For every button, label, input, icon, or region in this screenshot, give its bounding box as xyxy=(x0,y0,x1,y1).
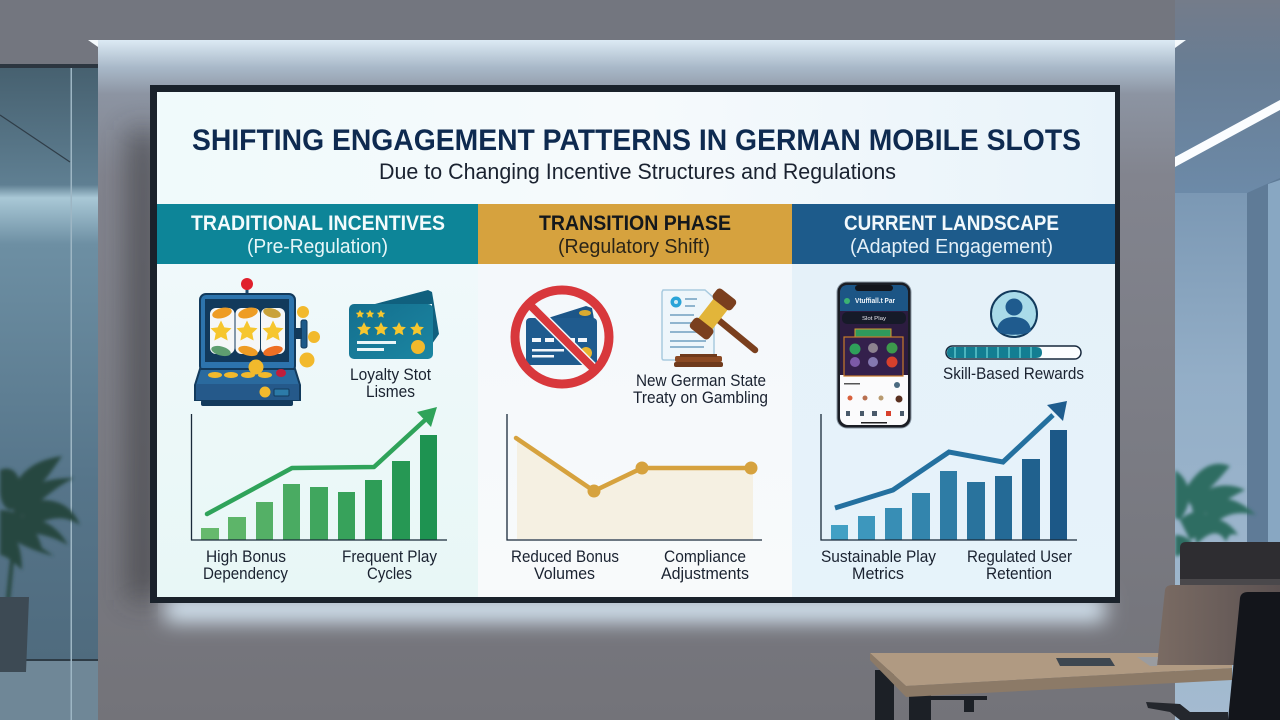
panel: current landscape xyxy=(792,204,1115,597)
label: frequent play cycles: Frequent Play xyxy=(342,547,437,566)
label: compliance adjustments: Adjustments xyxy=(661,564,749,583)
icon: treaty document and gavel xyxy=(662,287,755,367)
right window wall xyxy=(1175,0,1280,720)
screen backlight glow xyxy=(165,596,1105,622)
panel header xyxy=(478,204,792,264)
icon: mobile slots app phone: Vtuffiall.t Par xyxy=(855,298,895,305)
label: frequent play cycles: Cycles xyxy=(367,564,412,583)
laptop xyxy=(1137,585,1280,666)
label: state treaty: New German State xyxy=(636,371,766,390)
bar chart: high bonus and play cycles xyxy=(192,407,447,540)
subtitle: Due to Changing Incentive Structures and Regulations xyxy=(379,159,896,184)
desk xyxy=(870,653,1232,720)
panel background xyxy=(478,264,792,597)
panel background xyxy=(157,264,478,597)
panel header: TRADITIONAL INCENTIVES xyxy=(191,211,445,235)
panel header: CURRENT LANDSCAPE xyxy=(844,211,1059,235)
label: frequent play cycles xyxy=(342,547,437,583)
label: loyalty xyxy=(350,365,431,401)
label: reduced bonus volumes: Volumes xyxy=(534,564,595,583)
label: loyalty: Loyalty Stot xyxy=(350,365,431,384)
label: sustainable play metrics xyxy=(821,547,936,583)
icon: slot machine xyxy=(195,278,320,406)
label: compliance adjustments xyxy=(661,547,749,583)
panel header: (Regulatory Shift) xyxy=(558,235,710,258)
icon: progress bar xyxy=(946,346,1081,359)
panel: traditional incentives xyxy=(157,204,478,597)
label: skill-based rewards: Skill-Based Rewards xyxy=(943,364,1084,383)
foreground chair xyxy=(1228,592,1280,720)
wall screen xyxy=(150,85,1120,603)
ceiling xyxy=(0,0,1280,66)
label: compliance adjustments: Compliance xyxy=(664,547,746,566)
label: regulated user retention: Retention xyxy=(986,564,1052,583)
bar chart: sustainable play and retention xyxy=(821,401,1077,540)
icon: mobile slots app phone xyxy=(837,282,911,428)
label: sustainable play metrics: Sustainable Play xyxy=(821,547,936,566)
label: high bonus dependency: Dependency xyxy=(203,564,288,583)
label: state treaty: Treaty on Gambling xyxy=(633,388,768,407)
screen bezel xyxy=(150,85,1120,603)
label: state treaty xyxy=(633,371,768,407)
label: loyalty: Lismes xyxy=(366,382,415,401)
label: reduced bonus volumes: Reduced Bonus xyxy=(511,547,619,566)
label: sustainable play metrics: Metrics xyxy=(852,564,904,583)
label: high bonus dependency xyxy=(203,547,288,583)
panel header: (Adapted Engagement) xyxy=(850,235,1053,258)
trend arrow xyxy=(207,407,437,514)
background chair xyxy=(1180,542,1280,585)
screen surface xyxy=(157,92,1115,597)
right background plant xyxy=(1175,464,1256,556)
title: SHIFTING ENGAGEMENT PATTERNS IN GERMAN MOBILE SLOTS xyxy=(192,124,1081,157)
trend arrow xyxy=(835,401,1067,508)
left potted plant xyxy=(0,456,80,672)
left glass partition xyxy=(0,64,98,720)
panel header xyxy=(157,204,478,264)
panel header: TRANSITION PHASE xyxy=(539,211,731,235)
icon: user avatar xyxy=(991,291,1037,337)
icon: loyalty card xyxy=(349,290,439,359)
icon: mobile slots app phone: Slot Play xyxy=(862,316,886,322)
panel header xyxy=(792,204,1115,264)
label: high bonus dependency: High Bonus xyxy=(206,547,286,566)
line chart: reduced bonus volumes and compliance adjustments xyxy=(507,414,762,540)
label: reduced bonus volumes xyxy=(511,547,619,583)
label: regulated user retention: Regulated User xyxy=(967,547,1072,566)
icon: banned bonus card xyxy=(515,290,609,384)
label: regulated user retention xyxy=(967,547,1072,583)
panel header: (Pre-Regulation) xyxy=(247,235,388,258)
panel: transition phase xyxy=(478,204,792,597)
panel background xyxy=(792,264,1115,597)
